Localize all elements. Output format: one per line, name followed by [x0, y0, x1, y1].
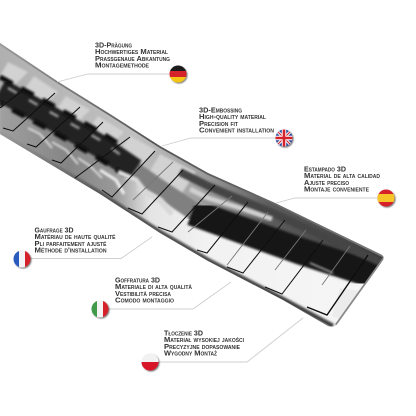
- text: Polish features: Materiał wysokiej jakości: [164, 335, 245, 344]
- text: Italian features: Materiale di alta qualità: [115, 282, 192, 291]
- text: English features: [199, 106, 274, 135]
- plate upper band: [0, 43, 384, 327]
- text: French features: [34, 226, 116, 255]
- text: French features: Matériau de haute qualité: [34, 232, 116, 241]
- icon: Italian flag: [91, 300, 109, 318]
- top rim: [0, 43, 384, 256]
- icon: French flag: [13, 250, 31, 268]
- text: Polish features: Wygodny Montaż: [164, 349, 217, 358]
- text: French features: Méthode d'installation: [34, 246, 107, 255]
- callout: Polish: [141, 328, 245, 371]
- text: German features: Hochwertiges Material: [95, 47, 168, 56]
- text: English features: High-quality material: [199, 112, 266, 121]
- text: German features: Prassgenaue Abkantung: [95, 54, 170, 63]
- callout: Italian: [91, 276, 192, 318]
- bottom rim: [0, 133, 333, 326]
- lighter upper facets: [0, 62, 196, 196]
- text: Spanish features: [304, 164, 380, 194]
- text: Italian features: Vestibilità precisa: [115, 289, 171, 298]
- text: French features: Pli parfaitement ajusté: [34, 239, 107, 248]
- black slat lines: [0, 90, 368, 315]
- text: Spanish features: Material de alta calidad: [304, 171, 380, 180]
- text: English features: Convenient installation: [199, 126, 274, 135]
- chrome bumper protector plate: [0, 43, 384, 327]
- left dark band: [0, 90, 135, 170]
- white reflection streaks: [28, 128, 352, 285]
- callout: German: [95, 40, 187, 83]
- text: German features: Montagemethode: [95, 61, 150, 70]
- text: Italian features: [115, 276, 192, 305]
- right end rim: [336, 258, 384, 325]
- text: Italian features: Goffratura 3D: [115, 276, 160, 284]
- text: German features: [95, 40, 170, 70]
- text: Polish features: [164, 328, 245, 358]
- icon: Spanish flag: [377, 189, 395, 207]
- right dark band: [192, 212, 380, 277]
- scalloped dark bumps: [0, 77, 125, 148]
- plate lower chrome band: [0, 106, 377, 326]
- text: English features: Precision fit: [199, 119, 238, 128]
- text: English features: 3D-Embossing: [199, 106, 242, 114]
- icon: German flag: [169, 65, 187, 83]
- text: Polish features: Precyzyjne dopasowanie: [164, 342, 241, 351]
- text: Spanish features: Ajuste preciso: [304, 178, 349, 187]
- callout: English: [199, 106, 293, 147]
- text: Spanish features: Montaje conveniente: [304, 185, 370, 194]
- text: French features: Gaufrage 3D: [34, 226, 74, 234]
- leader lines: [28, 74, 380, 362]
- text: Italian features: Comodo montaggio: [115, 296, 174, 305]
- text: German features: 3D-Prägung: [95, 40, 132, 50]
- mid grey reflection: [130, 168, 198, 214]
- icon: Polish flag: [141, 353, 159, 371]
- icon: UK flag: [275, 129, 293, 147]
- text: Spanish features: Estampado 3D: [304, 164, 346, 174]
- callout: French: [13, 226, 116, 268]
- callout: Spanish: [304, 164, 395, 207]
- text: Polish features: Tłoczenie 3D: [164, 328, 203, 338]
- grey slat lines: [133, 162, 350, 285]
- right zone upper dark and light streak: [180, 172, 380, 262]
- lower light block right end: [332, 288, 358, 318]
